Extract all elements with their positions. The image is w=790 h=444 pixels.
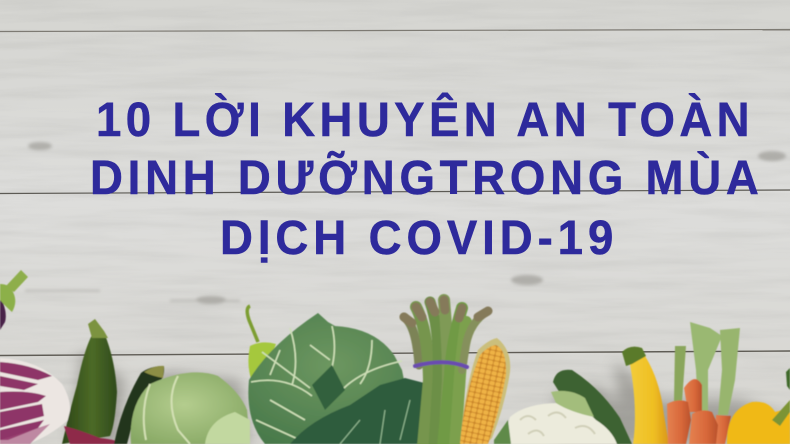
title: 10 LỜI KHUYÊN AN TOÀN: [96, 93, 750, 146]
icon: yellow pepper: [727, 368, 790, 444]
title: DỊCH COVID-19: [220, 211, 613, 264]
icon: dark cucumber: [114, 366, 164, 444]
vegetable drop shadows: [70, 350, 790, 444]
title: DINH DƯỠNGTRONG MÙA: [90, 151, 759, 204]
icon: savoy cabbage: [248, 313, 432, 444]
icon: cucumber: [553, 370, 632, 444]
icon: yellow zucchini: [622, 347, 669, 444]
icon: green cabbage: [131, 372, 250, 444]
icon: asparagus bunch: [404, 300, 488, 444]
icon: zucchini: [62, 319, 124, 444]
icon: eggplant: [0, 270, 28, 330]
title: [90, 93, 759, 264]
icon: green chili pepper: [247, 306, 276, 382]
icon: corn: [460, 338, 510, 444]
icon: radicchio: [0, 358, 70, 444]
icon: carrots: [667, 322, 740, 444]
icon: cauliflower: [494, 391, 617, 444]
